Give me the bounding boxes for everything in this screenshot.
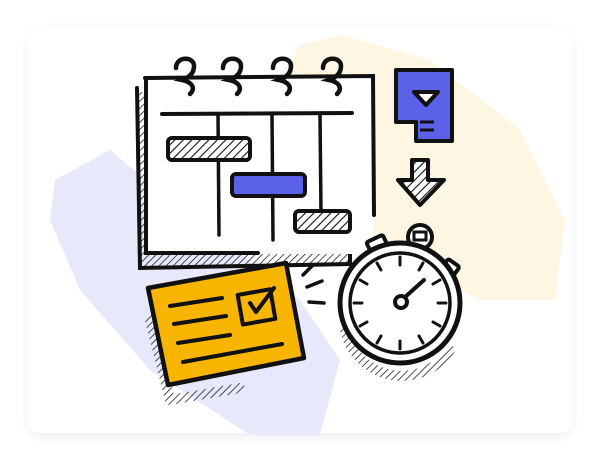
yellow task card xyxy=(148,263,304,400)
arrow down xyxy=(398,160,444,205)
brush stroke: lavender xyxy=(50,150,340,435)
card background xyxy=(28,28,572,436)
document icon xyxy=(396,70,452,141)
rings xyxy=(176,59,341,94)
header line xyxy=(162,113,352,114)
gantt bars xyxy=(168,138,250,160)
motion lines xyxy=(303,265,324,303)
calendar xyxy=(137,59,374,268)
brush stroke: cream xyxy=(270,35,565,300)
columns xyxy=(218,114,219,235)
stopwatch xyxy=(340,225,460,376)
back page shadow xyxy=(137,88,350,268)
